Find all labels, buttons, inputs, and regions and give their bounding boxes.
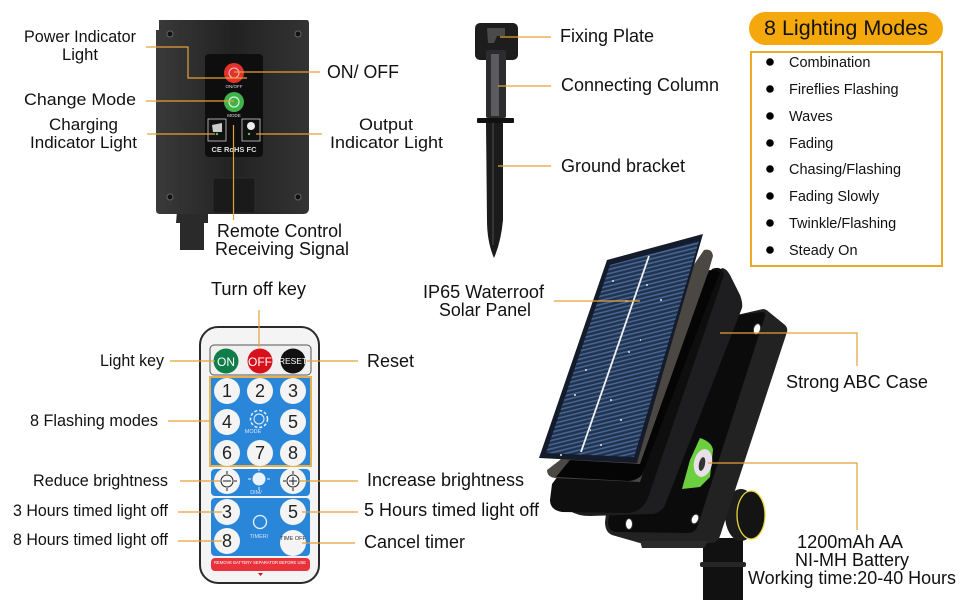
icon: dim sun: [248, 468, 270, 496]
label: remote control receiving signal: Remote Control: [217, 221, 342, 241]
RESET button: [279, 348, 307, 374]
crossbar: [477, 118, 514, 123]
timer buttons: 8: [222, 531, 232, 551]
increase brightness button: [280, 468, 306, 494]
heading: 8 lighting modes: 8 Lighting Modes: [764, 17, 928, 40]
icon: power button: ON/OFF: [226, 84, 243, 89]
leader lines: [146, 37, 857, 543]
panel: solar unit: [539, 234, 787, 600]
label: 8 flashing modes: 8 Flashing modes: [30, 412, 158, 430]
icon: mode button: [224, 92, 244, 118]
icon: alarm clock: [250, 516, 269, 540]
icon: dim sun: DIM/: [250, 490, 262, 496]
icon: mode gear: MODE: [245, 429, 262, 435]
icon: separator arrow: [258, 573, 263, 576]
icon: mode gear: [245, 410, 268, 435]
label: change mode: Change Mode: [24, 91, 136, 109]
ON button: [214, 348, 238, 374]
label: battery: [748, 532, 956, 588]
icon: mounting hole top: [752, 323, 762, 335]
label: battery: Working time:20-40 Hours: [748, 568, 956, 588]
mode buttons: 7: [255, 443, 265, 463]
solar panel: [539, 234, 703, 463]
panel: lighting modes list: Combination: [789, 55, 870, 71]
label: fixing plate: Fixing Plate: [560, 26, 654, 46]
label: on/off: ON/ OFF: [327, 62, 399, 82]
control panel: [205, 54, 263, 157]
remote body: [200, 327, 319, 583]
box body: [156, 20, 309, 214]
mode buttons: 4: [222, 412, 232, 432]
icon: plate clip: [487, 28, 505, 43]
label: increase brightness: Increase brightness: [367, 470, 524, 490]
icon: battery: [682, 438, 715, 489]
icon: mounting hole left: [626, 518, 632, 530]
label: output indicator light: Indicator Light: [330, 134, 443, 152]
mode buttons: 8: [288, 443, 298, 463]
label: ip65 solar panel: [423, 282, 545, 320]
post: [703, 538, 743, 600]
mode buttons: 2: [255, 381, 265, 401]
panel: remote control: [200, 327, 319, 583]
black sheet: [556, 270, 720, 481]
icon: lighting indicator: [242, 119, 260, 141]
mode buttons: 1: [222, 381, 232, 401]
label: ip65 solar panel: IP65 Waterroof: [423, 282, 545, 302]
heading: 8 lighting modes: [749, 12, 943, 45]
case front frame: [550, 268, 724, 513]
OFF button: [248, 348, 272, 374]
connector: [176, 211, 208, 250]
connecting column: [486, 50, 506, 118]
label: power indicator light: Light: [62, 46, 98, 64]
label: ip65 solar panel: Solar Panel: [439, 300, 531, 320]
icon: charging indicator: [208, 119, 226, 141]
top button tray: [210, 345, 311, 375]
panel: lighting modes list: [751, 52, 942, 266]
label: charging indicator light: Charging: [49, 116, 118, 134]
red separator strip: [211, 558, 310, 571]
dim panel: [211, 469, 310, 496]
icon: mode button: MODE: [227, 113, 241, 118]
label: remote control receiving signal: Receiving Signal: [215, 239, 349, 259]
ABC case middle: [552, 268, 742, 516]
panel: lighting modes list: Steady On: [789, 243, 858, 259]
label: output indicator light: Output: [359, 116, 413, 134]
knob: [725, 489, 765, 541]
panel: ground stake: [475, 23, 518, 258]
icon: mounting hole right: [690, 513, 700, 525]
panel: lighting modes list: Fading Slowly: [789, 189, 880, 205]
label: remote control receiving signal: [215, 221, 349, 259]
grey film: [547, 250, 713, 482]
mode buttons: [214, 378, 306, 466]
label: reset: Reset: [367, 351, 414, 371]
panel: lighting modes list: Waves: [789, 109, 833, 125]
mode buttons: 3: [288, 381, 298, 401]
label: battery: 1200mAh AA: [797, 532, 903, 552]
timer buttons: TIME OFF: [280, 536, 306, 542]
label: power indicator light: Power Indicator: [24, 28, 136, 46]
label: 3 hours timed light off: 3 Hours timed light off: [13, 502, 168, 520]
RESET button: RESET: [279, 356, 307, 366]
post collar: [700, 562, 746, 567]
panel: lighting modes list: Twinkle/Flashing: [789, 216, 896, 232]
ON button: ON: [217, 355, 235, 369]
label: charging indicator light: Indicator Light: [30, 134, 137, 152]
column highlight: [491, 54, 499, 116]
red separator strip: REMOVE BATTERY SEPARATOR BEFORE USE: [214, 560, 306, 566]
label: battery: NI-MH Battery: [795, 550, 909, 570]
icon: clip slot: [213, 178, 255, 213]
spike ridge: [492, 123, 494, 245]
timer panel: [211, 498, 310, 556]
bottom terminals: [640, 541, 708, 548]
mode buttons: 5: [288, 412, 298, 432]
panel: lighting modes list: Chasing/Flashing: [789, 162, 901, 178]
spike: [486, 123, 503, 258]
label: turn off key: Turn off key: [211, 279, 306, 299]
label: connecting column: Connecting Column: [561, 75, 719, 95]
panel: lighting modes list: Fireflies Flashing: [789, 82, 899, 98]
timer buttons: 3: [222, 502, 232, 522]
label: reduce brightness: Reduce brightness: [33, 472, 168, 490]
label: power indicator light: [24, 28, 136, 64]
label: output indicator light: [330, 116, 443, 152]
OFF button: OFF: [248, 355, 272, 369]
panel: lighting modes list: Fading: [789, 136, 833, 152]
label: charging indicator light: [30, 116, 137, 152]
icon: alarm clock: TIMER/: [250, 534, 269, 540]
reduce brightness button: [214, 468, 240, 494]
label: 8 hours timed light off: 8 Hours timed light off: [13, 531, 168, 549]
label: ground bracket: Ground bracket: [561, 156, 685, 176]
screws: [167, 31, 301, 200]
mode buttons: 6: [222, 443, 232, 463]
timer buttons: [214, 499, 306, 556]
plate inner face: [608, 312, 765, 533]
label: 5 hours timed light off: 5 Hours timed light off: [364, 500, 540, 520]
panel: control box product: [156, 20, 309, 250]
fixing plate: [475, 23, 518, 60]
label: cancel timer: Cancel timer: [364, 532, 465, 552]
label: strong abc case: Strong ABC Case: [786, 372, 928, 392]
mode panel: [210, 377, 311, 466]
timer buttons: 5: [288, 502, 298, 522]
icon: power button: [224, 63, 244, 89]
label: light key: Light key: [100, 352, 165, 370]
certification marks: CE RoHS FC: [212, 145, 257, 154]
back plate: [605, 309, 787, 543]
